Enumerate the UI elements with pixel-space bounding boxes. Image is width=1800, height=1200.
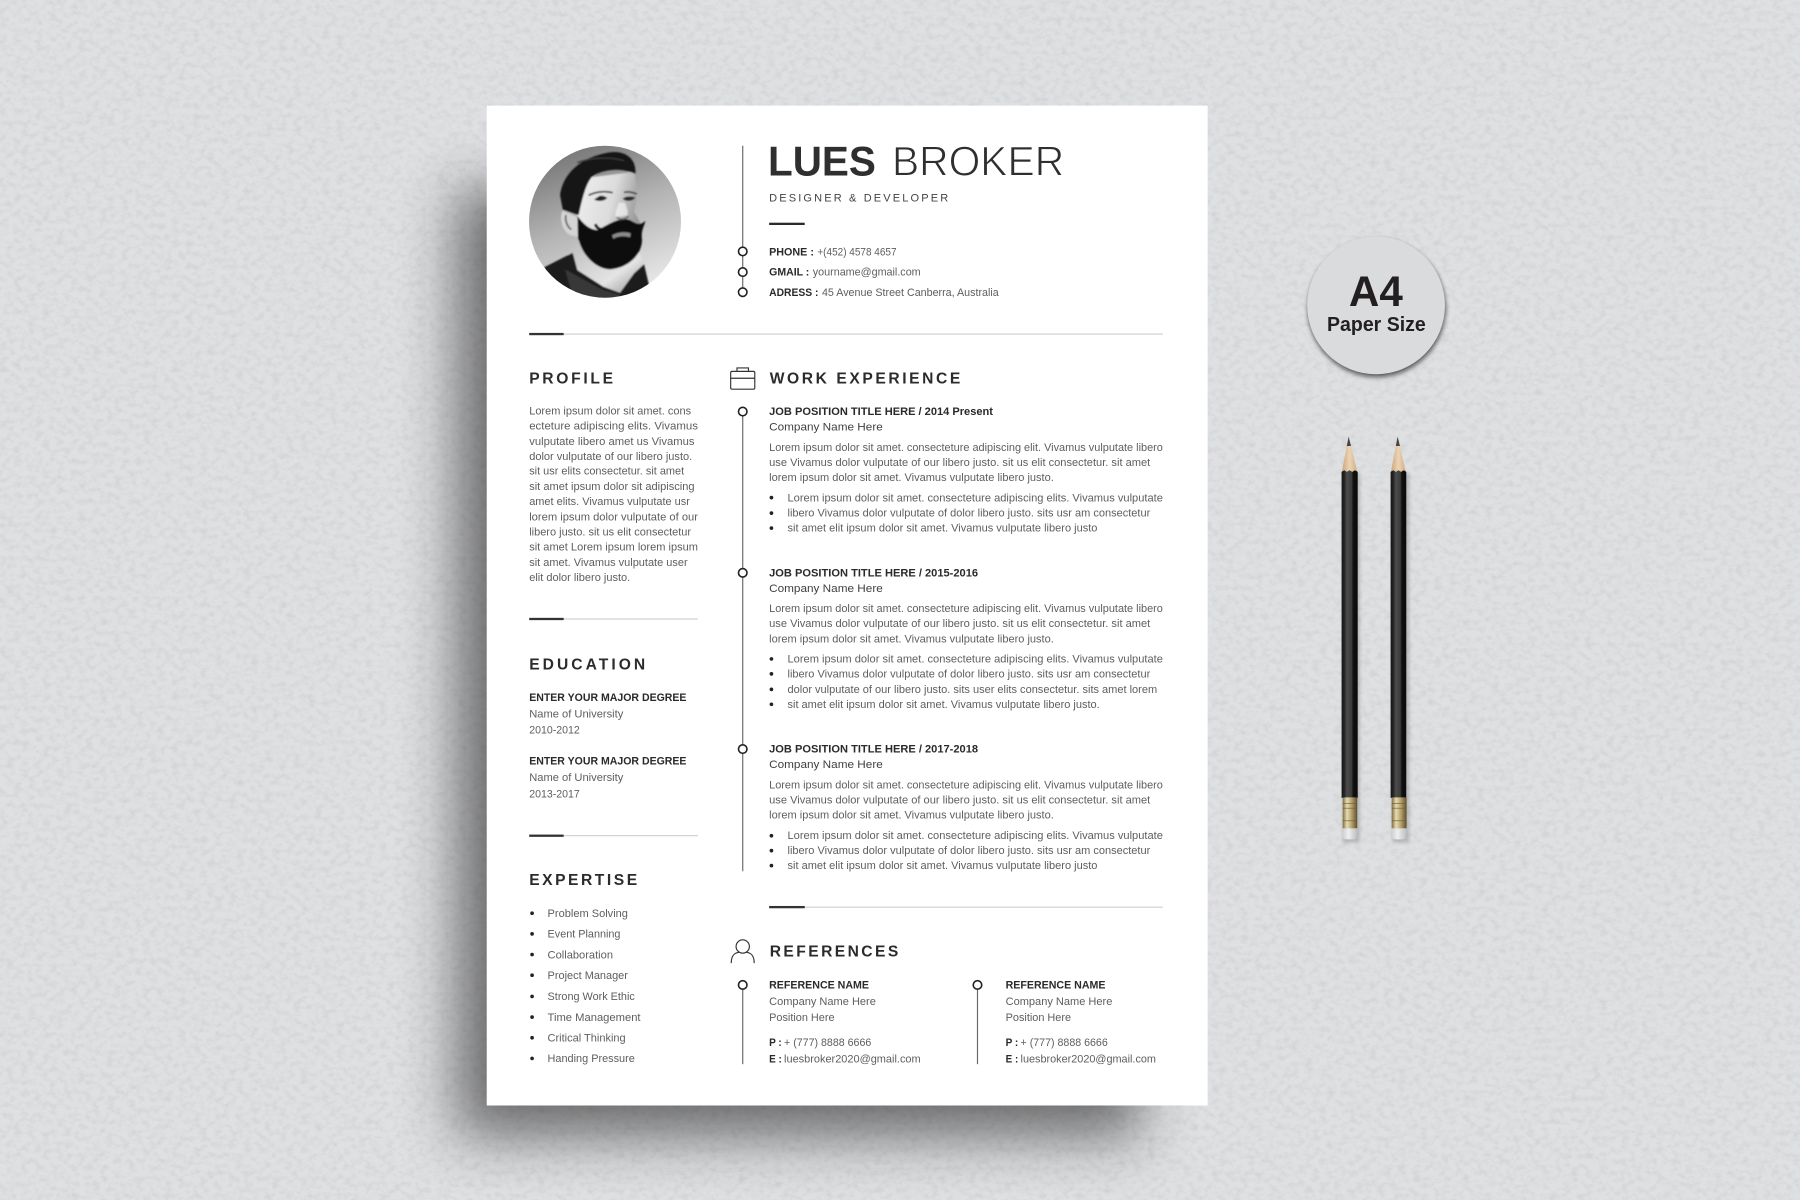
panel: job 2: libero Vivamus dolor vulputate of dolor libero justo. sits usr am consectetur — [788, 669, 1151, 681]
panel: job 2: sit amet elit ipsum dolor sit amet. Vivamus vulputate libero justo. — [788, 699, 1100, 711]
contact details: GMAIL : — [769, 267, 809, 279]
contact details: PHONE : — [769, 246, 814, 258]
panel: job 1: Lorem ipsum dolor sit amet. consecteture adipiscing elit. Vivamus vulputate libero — [769, 442, 1163, 454]
panel: job 2: lorem ipsum dolor sit amet. Vivamus vulputate libero justo. — [769, 633, 1054, 645]
resume sheet drop shadow — [457, 189, 1140, 1136]
subtitle: role: DESIGNER & DEVELOPER — [769, 192, 948, 204]
heading: education: EDUCATION — [529, 656, 645, 673]
panel: reference 1 — [738, 979, 921, 1065]
panel: job 3: Lorem ipsum dolor sit amet. consecteture adipiscing elits. Vivamus vulputate — [788, 830, 1163, 842]
panel: reference 1: Position Here — [769, 1012, 835, 1024]
panel: reference 2: Position Here — [1006, 1012, 1071, 1024]
panel: reference 2: P : — [1006, 1037, 1018, 1049]
heading: expertise: EXPERTISE — [529, 872, 637, 889]
text block: profile paragraph — [529, 405, 698, 584]
references divider — [769, 906, 1163, 908]
panel: job 2: Lorem ipsum dolor sit amet. consecteture adipiscing elit. Vivamus vulputate libero — [769, 603, 1163, 615]
panel: profile — [529, 370, 698, 584]
panel: job 1: Lorem ipsum dolor sit amet. consecteture adipiscing elits. Vivamus vulputate — [788, 492, 1163, 504]
panel: job 1: use Vivamus dolor vulputate of our libero justo. sit us elit consectetur. sit amet — [769, 457, 1150, 469]
panel: job 3 — [769, 743, 1163, 872]
sidebar divider — [529, 835, 698, 837]
education entry 1 — [529, 692, 686, 737]
text block: profile paragraph: sit amet ipsum dolor sit adipiscing — [529, 481, 695, 493]
contact details: +(452) 4578 4657 — [817, 246, 897, 258]
list: expertise skills: Project Manager — [548, 970, 628, 982]
panel: reference 1: E : — [769, 1053, 782, 1065]
text block: profile paragraph: Lorem ipsum dolor sit amet. cons — [529, 405, 691, 417]
panel: job 2: Company Name Here — [769, 583, 883, 595]
panel: job 2: Lorem ipsum dolor sit amet. consecteture adipiscing elits. Vivamus vulputate — [788, 654, 1163, 666]
heading: work experience: WORK EXPERIENCE — [770, 370, 960, 387]
panel: reference 1: + (777) 8888 6666 — [784, 1037, 871, 1049]
panel: job 1: libero Vivamus dolor vulputate of dolor libero justo. sits usr am consectetur — [788, 508, 1151, 520]
panel: job 2: JOB POSITION TITLE HERE / 2015-2016 — [769, 567, 978, 579]
work timeline — [738, 407, 747, 871]
callout: A4 paper size badge — [1307, 236, 1446, 377]
title: name: BROKER — [892, 139, 1064, 185]
panel: job 3: Lorem ipsum dolor sit amet. consecteture adipiscing elit. Vivamus vulputate libero — [769, 780, 1163, 792]
list: expertise skills: Time Management — [548, 1012, 641, 1024]
education entry 1: ENTER YOUR MAJOR DEGREE — [529, 692, 686, 704]
text block: profile paragraph: vulputate libero amet us Vivamus — [529, 436, 695, 448]
panel: reference 1: P : — [769, 1037, 782, 1049]
sidebar divider — [529, 618, 698, 620]
text block: profile paragraph: ecteture adipiscing elits. Vivamus — [529, 420, 698, 432]
text block: profile paragraph: amet elits. Vivamus vulputate usr — [529, 496, 690, 508]
panel: reference 2: REFERENCE NAME — [1006, 979, 1105, 991]
panel: job 3: use Vivamus dolor vulputate of our libero justo. sit us elit consectetur. sit amet — [769, 795, 1150, 807]
callout: A4 paper size badge: A4 — [1349, 268, 1403, 316]
icon: person — [731, 940, 754, 963]
text block: profile paragraph: sit amet Lorem ipsum lorem ipsum — [529, 541, 698, 553]
panel: job 1: sit amet elit ipsum dolor sit amet. Vivamus vulputate libero justo — [788, 523, 1098, 535]
contact details: yourname@gmail.com — [813, 267, 921, 279]
panel: reference 2: + (777) 8888 6666 — [1021, 1037, 1108, 1049]
list: expertise skills: Critical Thinking — [548, 1033, 626, 1045]
title: name: LUES — [768, 139, 876, 185]
education entry 2 — [529, 756, 686, 800]
panel: job 1: Company Name Here — [769, 421, 883, 433]
panel: expertise — [529, 872, 641, 1065]
panel: job 1: JOB POSITION TITLE HERE / 2014 Present — [769, 406, 993, 418]
panel: reference 2: Company Name Here — [1006, 996, 1112, 1008]
list: expertise skills: Collaboration — [548, 949, 613, 961]
panel: job 2: dolor vulputate of our libero justo. sits user elits consectetur. sits amet lorem — [788, 684, 1157, 696]
panel: job 2 — [769, 567, 1163, 711]
panel: reference 1: Company Name Here — [769, 996, 876, 1008]
icon: briefcase — [731, 368, 755, 389]
panel: job 1 — [769, 406, 1163, 535]
text block: profile paragraph: elit dolor libero justo. — [529, 572, 630, 584]
list: expertise skills — [530, 908, 641, 1065]
panel: job 3: Company Name Here — [769, 759, 883, 771]
panel: reference 2 — [973, 979, 1156, 1065]
text block: profile paragraph: sit usr elits consectetur. sit amet — [529, 466, 684, 478]
header divider — [529, 333, 1163, 335]
contact timeline — [738, 146, 747, 296]
panel: reference 1: REFERENCE NAME — [769, 979, 869, 991]
icon: pencil 2 — [1391, 437, 1409, 843]
list: expertise skills: Handing Pressure — [548, 1053, 635, 1065]
education entry 2: ENTER YOUR MAJOR DEGREE — [529, 756, 686, 768]
title: name — [768, 139, 1064, 185]
panel: job 3: lorem ipsum dolor sit amet. Vivamus vulputate libero justo. — [769, 809, 1054, 821]
heading: profile: PROFILE — [529, 370, 613, 387]
panel: job 2: use Vivamus dolor vulputate of our libero justo. sit us elit consectetur. sit amet — [769, 618, 1150, 630]
panel: job 3: sit amet elit ipsum dolor sit amet. Vivamus vulputate libero justo — [788, 860, 1098, 872]
panel: job 1: lorem ipsum dolor sit amet. Vivamus vulputate libero justo. — [769, 472, 1054, 484]
callout: A4 paper size badge: Paper Size — [1327, 314, 1426, 336]
panel: reference 2: E : — [1006, 1053, 1018, 1065]
list: expertise skills: Problem Solving — [548, 908, 628, 920]
icon: portrait photo — [527, 143, 683, 303]
panel: education — [529, 656, 686, 800]
list: expertise skills: Strong Work Ethic — [548, 991, 635, 1003]
contact details: 45 Avenue Street Canberra, Australia — [822, 287, 999, 299]
panel: reference 1: luesbroker2020@gmail.com — [784, 1053, 921, 1065]
panel: job 3: JOB POSITION TITLE HERE / 2017-2018 — [769, 743, 978, 755]
education entry 2: Name of University — [529, 772, 624, 784]
text block: profile paragraph: lorem ipsum dolor vulputate of our — [529, 512, 698, 524]
contact details — [769, 246, 999, 299]
short rule — [769, 223, 805, 225]
education entry 1: Name of University — [529, 708, 624, 720]
panel: resume sheet — [487, 106, 1208, 1105]
panel: reference 2: luesbroker2020@gmail.com — [1021, 1053, 1156, 1065]
heading: references: REFERENCES — [770, 943, 898, 960]
text block: profile paragraph: libero justo. sit us elit consectetur — [529, 527, 692, 539]
text block: profile paragraph: sit amet. Vivamus vulputate user — [529, 557, 688, 569]
education entry 1: 2010-2012 — [529, 725, 580, 737]
education entry 2: 2013-2017 — [529, 788, 580, 800]
contact details: ADRESS : — [769, 287, 818, 299]
list: expertise skills: Event Planning — [548, 929, 621, 941]
text block: profile paragraph: dolor vulputate of our libero justo. — [529, 451, 692, 463]
icon: pencil 1 — [1342, 437, 1360, 843]
panel: job 3: libero Vivamus dolor vulputate of dolor libero justo. sits usr am consectetur — [788, 845, 1151, 857]
